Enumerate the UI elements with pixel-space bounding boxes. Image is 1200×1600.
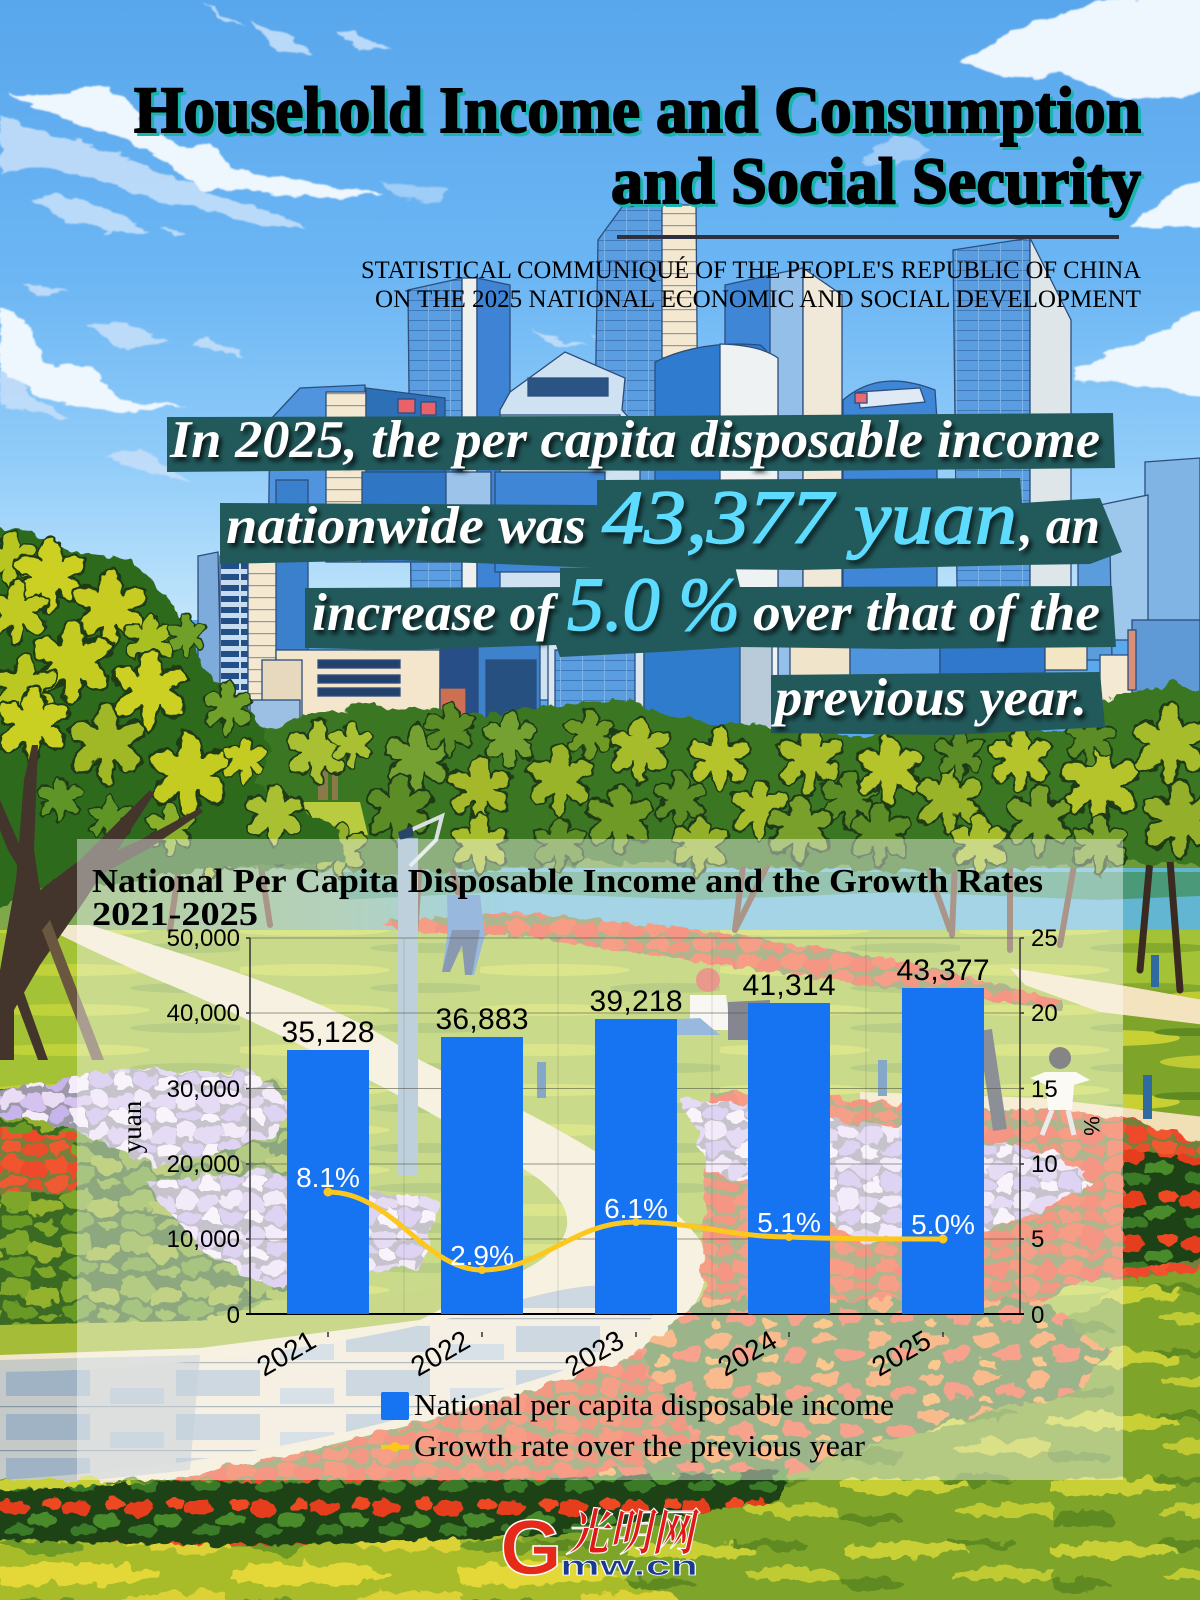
upper flower strip bbox=[380, 912, 1060, 1010]
far right towers bbox=[1145, 458, 1200, 640]
headline text: nationwide was bbox=[226, 497, 586, 555]
mid left building with red windows bbox=[268, 385, 365, 560]
background tree trunks bbox=[170, 850, 1180, 990]
year labels: 2024 bbox=[713, 1324, 782, 1382]
left axis labels: 20,000 bbox=[167, 1151, 240, 1178]
pavement tiles bbox=[0, 1285, 660, 1480]
right axis labels bbox=[1031, 925, 1058, 1329]
grid lines bbox=[250, 938, 1020, 1314]
front round building bbox=[655, 344, 778, 700]
lower cream offices bbox=[276, 650, 440, 734]
park visitors bbox=[442, 895, 1090, 1135]
income value labels: 43,377 bbox=[896, 954, 990, 987]
chart title: 2021-2025 bbox=[92, 896, 258, 933]
headline text: , an bbox=[1018, 497, 1100, 555]
subtitle: STATISTICAL COMMUNIQUÉ OF THE PEOPLE'S REPUBLIC OF CHINA bbox=[361, 256, 1141, 284]
left flower beds bbox=[0, 1068, 437, 1334]
growth-rate line bbox=[324, 1188, 948, 1274]
growth-rate value labels: 6.1% bbox=[604, 1193, 668, 1224]
right axis labels: 20 bbox=[1031, 1000, 1058, 1027]
title: Household Income and Consumption bbox=[134, 74, 1141, 147]
left axis title: yuan bbox=[117, 1100, 147, 1153]
lamp post bbox=[398, 816, 442, 1175]
year labels bbox=[252, 1324, 936, 1382]
lower middle bbox=[362, 472, 447, 562]
income value labels: 36,883 bbox=[436, 1003, 528, 1036]
chart title bbox=[92, 863, 1043, 933]
right axis labels: 0 bbox=[1031, 1302, 1044, 1329]
left axis labels: 50,000 bbox=[167, 925, 240, 952]
logo G: G bbox=[500, 1503, 562, 1591]
right tower bbox=[953, 238, 1030, 670]
income value labels: 35,128 bbox=[282, 1016, 374, 1049]
clouds bbox=[0, 0, 1200, 482]
tree line foliage bbox=[181, 704, 1200, 881]
headline banners bbox=[167, 413, 1122, 735]
title rule bbox=[617, 235, 1119, 239]
key figure: growth: 5.0 % bbox=[567, 563, 740, 647]
left axis labels: 30,000 bbox=[167, 1076, 240, 1103]
growth-rate value labels: 8.1% bbox=[296, 1162, 360, 1193]
income value labels: 41,314 bbox=[742, 969, 836, 1002]
legend bbox=[381, 1387, 894, 1463]
lower left tall block bbox=[198, 552, 222, 730]
translucent chart panel bbox=[77, 839, 1123, 1480]
income value labels bbox=[282, 954, 990, 1049]
right axis labels: 15 bbox=[1031, 1076, 1058, 1103]
skyline buildings bbox=[198, 205, 1200, 740]
subtitle: ON THE 2025 NATIONAL ECONOMIC AND SOCIAL DEVELOPMENT bbox=[375, 286, 1141, 313]
left axis labels: 0 bbox=[227, 1302, 240, 1329]
lower red flower row bbox=[0, 1470, 790, 1546]
year labels: 2023 bbox=[560, 1324, 629, 1382]
far right paths bbox=[1010, 968, 1200, 1028]
sky bbox=[0, 0, 1200, 620]
left axis labels: 40,000 bbox=[167, 1000, 240, 1027]
tower center right bbox=[725, 268, 803, 690]
bollards bbox=[537, 955, 1159, 1119]
logo bbox=[500, 1493, 700, 1591]
axes bbox=[246, 938, 1024, 1337]
right axis labels: 10 bbox=[1031, 1151, 1058, 1178]
left tree leaves bbox=[0, 531, 304, 856]
year labels: 2022 bbox=[406, 1324, 475, 1382]
legend: National per capita disposable income bbox=[414, 1387, 894, 1422]
right axis labels: 5 bbox=[1031, 1226, 1044, 1253]
headline text: previous year. bbox=[771, 669, 1087, 727]
lawn and lake bbox=[0, 760, 1200, 1600]
logo Chinese name: 光明网 bbox=[566, 1493, 700, 1565]
title: and Social Security bbox=[611, 145, 1141, 218]
growth-rate value labels: 2.9% bbox=[450, 1240, 514, 1271]
left axis labels bbox=[167, 925, 240, 1329]
left tree trunk and branches bbox=[0, 745, 203, 1060]
growth-rate value labels: 5.1% bbox=[757, 1207, 821, 1238]
tree line bbox=[200, 682, 1200, 872]
left axis labels: 10,000 bbox=[167, 1226, 240, 1253]
pavement shaded side bbox=[0, 1355, 200, 1490]
foreground left tree canopy bbox=[0, 525, 345, 920]
tower center left bbox=[408, 278, 462, 700]
subtitle bbox=[361, 256, 1141, 313]
glass and white tower bbox=[590, 205, 665, 700]
bottom grass bbox=[0, 1270, 1200, 1600]
front low white building bbox=[500, 352, 640, 700]
combo chart: income bars and growth-rate line bbox=[117, 925, 1104, 1463]
year labels: 2025 bbox=[867, 1324, 936, 1382]
headline text: In 2025, the per capita disposable income bbox=[169, 411, 1100, 469]
headline text: increase of bbox=[312, 584, 559, 642]
income value labels: 39,218 bbox=[590, 985, 682, 1018]
right flower beds bbox=[160, 1090, 1200, 1492]
growth-rate value labels: 5.0% bbox=[911, 1209, 975, 1240]
headline text: over that of the bbox=[753, 584, 1100, 642]
dome building bbox=[843, 381, 937, 690]
growth-rate value labels bbox=[296, 1162, 975, 1271]
chart title: National Per Capita Disposable Income and the Growth Rates bbox=[92, 863, 1043, 900]
title bbox=[134, 74, 1141, 218]
curved park path bbox=[0, 925, 706, 1495]
income bars bbox=[287, 988, 984, 1314]
legend: Growth rate over the previous year bbox=[414, 1428, 866, 1463]
headline text bbox=[169, 411, 1100, 727]
right axis labels: 25 bbox=[1031, 925, 1058, 952]
small tree and clearing bbox=[300, 770, 368, 835]
lower right bush with red flowers bbox=[1123, 1150, 1200, 1270]
key figure: income: 43,377 yuan bbox=[602, 476, 1017, 560]
right axis title: % bbox=[1079, 1116, 1104, 1136]
lower left lawn strip bbox=[0, 1278, 500, 1355]
logo domain: mw.cn bbox=[560, 1550, 698, 1581]
year labels: 2021 bbox=[252, 1324, 321, 1382]
